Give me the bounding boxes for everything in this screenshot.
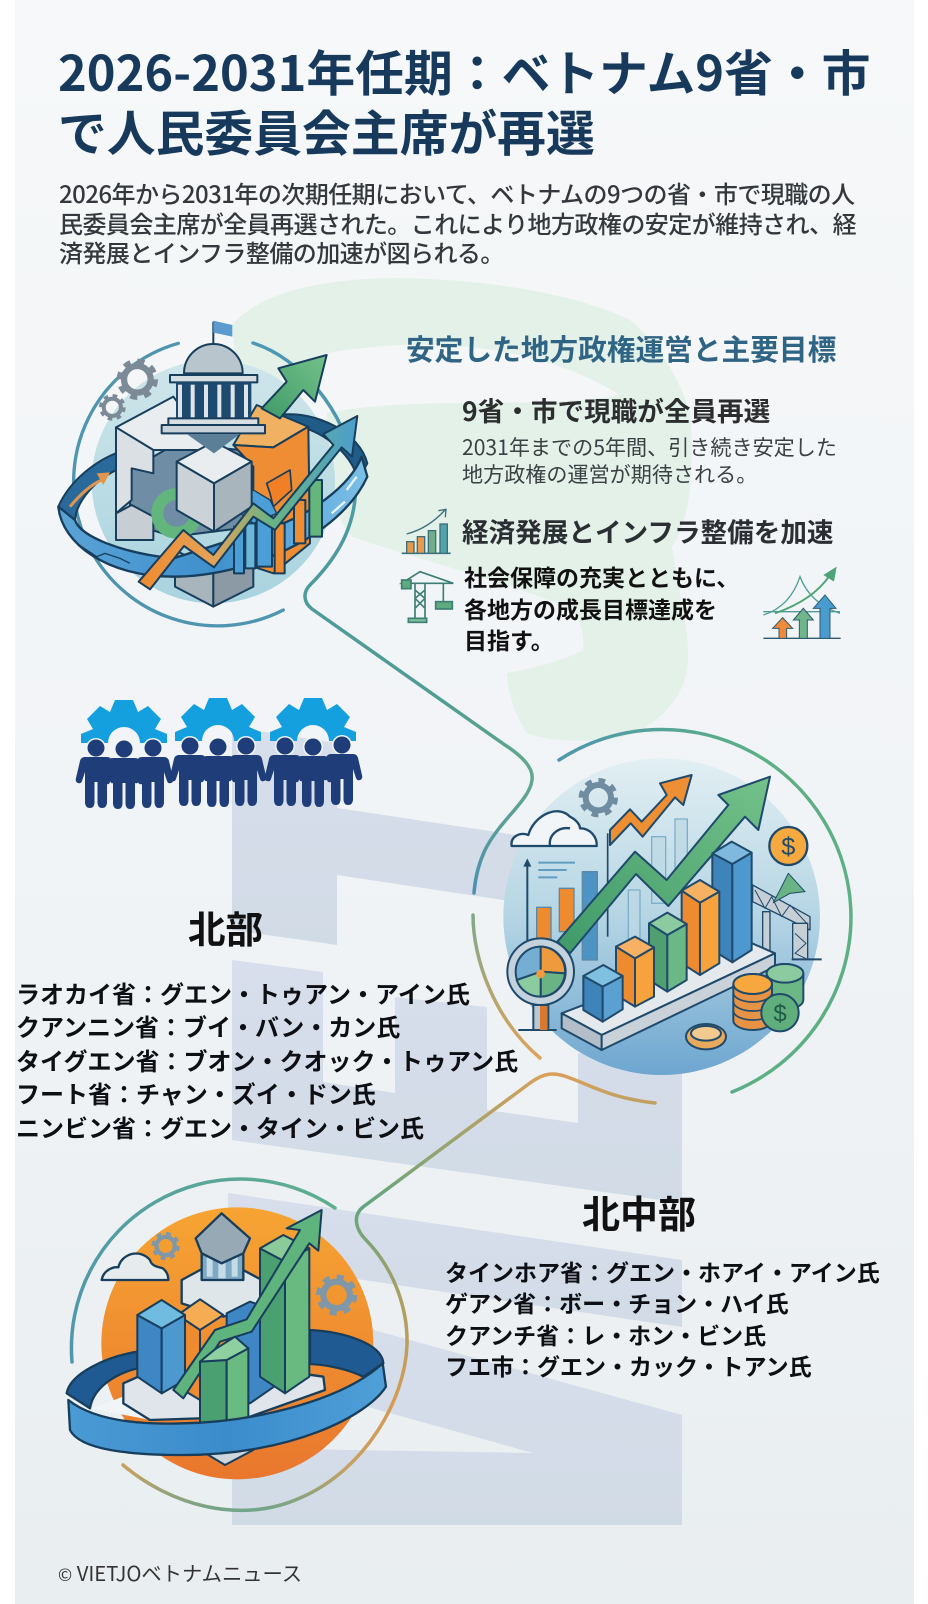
item text: stable administration bbox=[462, 432, 837, 489]
intro paragraph: 民委員会主席が全員再選された。これにより地方政権の安定が維持され、経 bbox=[59, 205, 856, 240]
list: north central chairpersons: ゲアン省：ボー・チョン・ハイ氏 bbox=[445, 1285, 789, 1319]
icon: rising bar chart bbox=[402, 509, 451, 553]
item heading: economy and infrastructure: 経済発展とインフラ整備を加速 bbox=[462, 511, 834, 550]
item text: social security and goals: 各地方の成長目標達成を bbox=[464, 590, 717, 624]
list: northern chairpersons bbox=[16, 975, 518, 1144]
section heading: 安定した地方政権運営と主要目標 bbox=[406, 328, 836, 369]
heading: 北中部: 北中部 bbox=[582, 1184, 696, 1239]
illustration: bars with ribbon on orange disk bbox=[67, 1207, 386, 1479]
item text: social security and goals bbox=[464, 559, 739, 656]
title: で人民委員会主席が再選 bbox=[58, 95, 595, 166]
list: north central chairpersons: クアンチ省：レ・ホン・ビン氏 bbox=[445, 1317, 766, 1351]
list: north central chairpersons: タインホア省：グエン・ホアイ・アイン氏 bbox=[445, 1254, 880, 1288]
illustration: government building with blocks and ribbon bbox=[58, 321, 367, 626]
heading: 北部: 北部 bbox=[188, 899, 263, 954]
panel: north central region bbox=[445, 1184, 880, 1382]
illustration: growth chart with coins: $ bbox=[781, 833, 795, 861]
list: northern chairpersons: ニンビン省：グエン・タイン・ビン氏 bbox=[16, 1109, 424, 1144]
arc around bottom illustration bbox=[71, 1179, 335, 1362]
item heading: incumbents re-elected: 9省・市で現職が全員再選 bbox=[462, 390, 770, 429]
list: northern chairpersons: クアンニン省：ブイ・バン・カン氏 bbox=[16, 1008, 400, 1043]
connector line: top circle to middle circle bbox=[253, 343, 532, 893]
list: north central chairpersons: フエ市：グエン・カック・トアン氏 bbox=[445, 1348, 812, 1382]
arc lower left of middle illustration bbox=[473, 915, 540, 1058]
icon: three groups of people with gears bbox=[76, 698, 362, 809]
item text: stable administration: 2031年までの5年間、引き続き安定した bbox=[462, 432, 837, 462]
connector line: middle circle to bottom circle bbox=[123, 1074, 655, 1510]
footer credit: © VIETJOベトナムニュース bbox=[58, 1557, 302, 1587]
watermark: blue stepped shape bbox=[228, 727, 682, 1525]
watermark: green S shape bbox=[232, 278, 692, 741]
intro paragraph bbox=[59, 175, 856, 269]
item text: social security and goals: 社会保障の充実とともに、 bbox=[464, 559, 739, 593]
arc around middle illustration bbox=[559, 729, 851, 1092]
list: northern chairpersons: ラオカイ省：グエン・トゥアン・アイン氏 bbox=[16, 975, 470, 1010]
list: northern chairpersons: フート省：チャン・ズイ・ドン氏 bbox=[16, 1075, 376, 1110]
illustration: growth chart with coins bbox=[503, 758, 822, 1075]
panel: northern region bbox=[16, 899, 518, 1144]
icon: bridge with up arrows bbox=[763, 567, 841, 638]
item text: social security and goals: 目指す。 bbox=[464, 622, 554, 656]
intro paragraph: 済発展とインフラ整備の加速が図られる。 bbox=[59, 234, 504, 269]
illustration: growth chart with coins: $ bbox=[773, 1001, 787, 1028]
title: 2026-2031年任期：ベトナム9省・市 bbox=[58, 35, 870, 106]
icon: construction crane bbox=[402, 572, 453, 622]
list: north central chairpersons bbox=[445, 1254, 880, 1382]
list: northern chairpersons: タイグエン省：ブオン・クオック・トゥアン氏 bbox=[16, 1042, 518, 1077]
item text: stable administration: 地方政権の運営が期待される。 bbox=[462, 459, 757, 489]
title bbox=[58, 35, 870, 166]
intro paragraph: 2026年から2031年の次期任期において、ベトナムの9つの省・市で現職の人 bbox=[59, 175, 855, 210]
